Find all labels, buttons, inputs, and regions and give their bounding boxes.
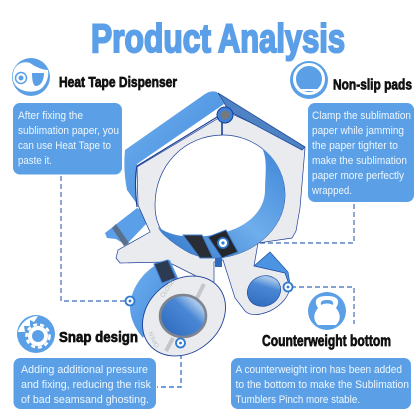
- panel: counterweight: [231, 358, 411, 409]
- title: Analysis: [218, 17, 345, 61]
- right black pad: [208, 230, 238, 258]
- connector: snap design: [157, 346, 181, 387]
- product: clamp illustration: [105, 91, 305, 373]
- panel: tape dispenser: After fixing the: [18, 110, 83, 122]
- icon: snap design: [17, 315, 55, 353]
- panel: counterweight: A counterweight iron has been added: [236, 364, 402, 376]
- knob cylinder: [130, 260, 178, 338]
- icon: non-slip pads: [290, 61, 328, 99]
- top left band: [124, 91, 224, 204]
- panel: counterweight: to the bottom to make the Sublimation: [236, 379, 409, 391]
- counterweight hole: [242, 270, 286, 312]
- connector: non-slip pads: [258, 204, 354, 243]
- panel: non-slip pads: [308, 103, 414, 202]
- title: Product: [91, 17, 211, 61]
- cutter blade flap: [105, 208, 148, 246]
- heading: tape dispenser: Heat Tape Dispenser: [59, 74, 177, 91]
- panel: non-slip pads: the paper tighter to: [312, 140, 398, 152]
- panel: tape dispenser: paste it.: [18, 155, 52, 167]
- panel: tape dispenser: can use Heat Tape to: [18, 140, 111, 152]
- panel: non-slip pads: wrapped.: [311, 185, 352, 197]
- top right dark band: [218, 93, 305, 150]
- knob labels: [148, 279, 176, 348]
- title: [91, 17, 345, 61]
- connector: tape dispenser: [61, 176, 127, 301]
- panel: non-slip pads: paper while jamming: [312, 125, 404, 137]
- marker: counterweight: [284, 282, 292, 292]
- panel: snap design: of bad seamsand ghosting.: [21, 394, 149, 406]
- knob clip: [154, 260, 176, 283]
- panel: snap design: and fixing, reducing the risk: [21, 379, 151, 391]
- panel: snap design: Adding additional pressure: [21, 364, 148, 376]
- knob labels: CLOSE: [160, 279, 176, 299]
- hinge pin: [217, 107, 233, 135]
- panel: non-slip pads: paper more perfectly: [312, 170, 404, 182]
- inner ring blue surface: [158, 148, 285, 258]
- connector: counterweight: [291, 287, 354, 324]
- panel: non-slip pads: make the sublimation: [312, 155, 407, 167]
- snap knob: [126, 259, 242, 373]
- heading: snap design: Snap design: [59, 329, 138, 346]
- panel: counterweight: Tumblers Pinch more stable.: [236, 394, 360, 406]
- panel: snap design: [14, 358, 156, 409]
- marker: non-slip pads: [218, 238, 228, 248]
- icon: tape dispenser: [12, 58, 50, 96]
- left black pad: [183, 235, 213, 258]
- knob disc: [126, 259, 242, 373]
- icon: counterweight: [308, 292, 346, 330]
- clamp white face: [116, 112, 305, 315]
- panel: tape dispenser: sublimation paper, you: [18, 125, 119, 137]
- knob grey stripes: [166, 284, 204, 351]
- knob labels: OPEN: [148, 330, 161, 348]
- knob hole: [160, 295, 206, 337]
- center knuckle: [215, 258, 222, 267]
- marker: tape dispenser: [126, 296, 134, 306]
- marker: snap design: [176, 338, 185, 348]
- panel: tape dispenser: [13, 103, 122, 174]
- right cylinder behind arm: [254, 252, 290, 284]
